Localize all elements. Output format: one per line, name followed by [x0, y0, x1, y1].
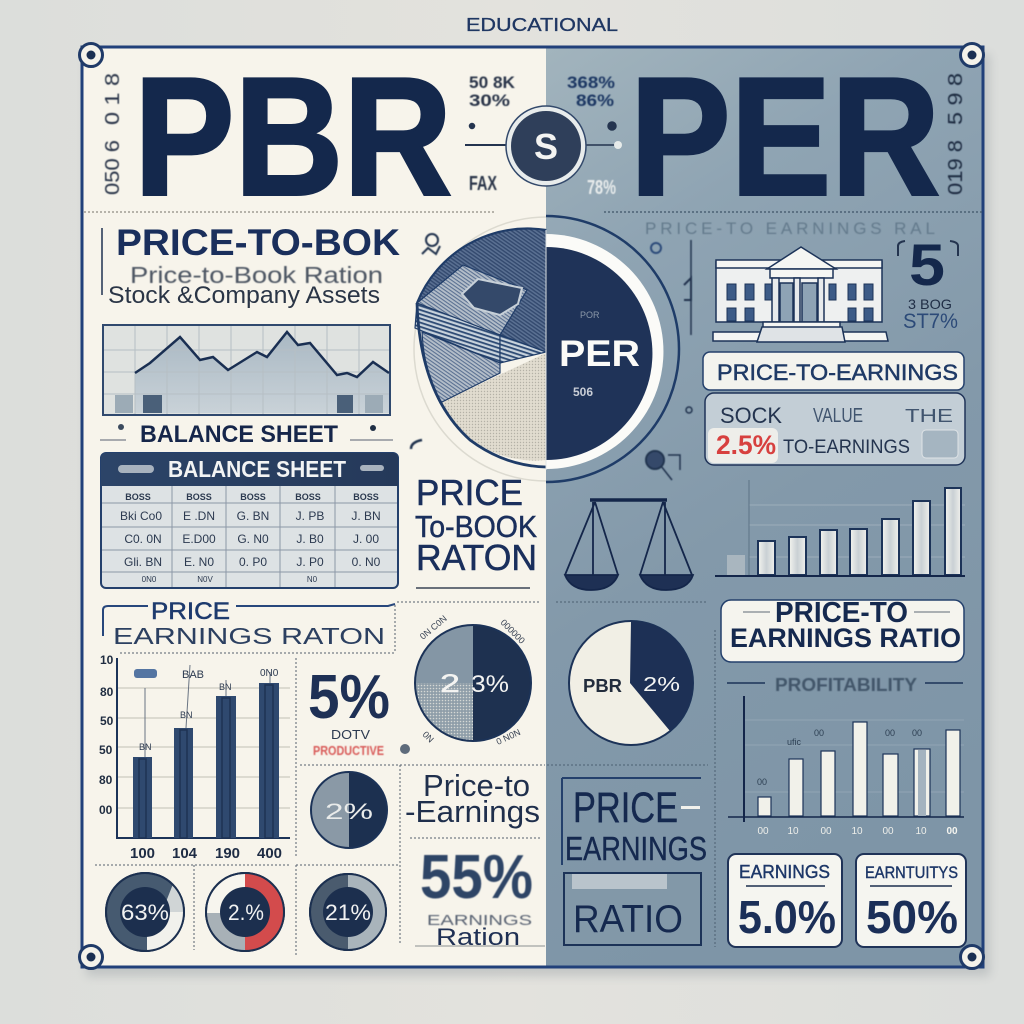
- central pie: PBR vs PER: [414, 216, 679, 482]
- corner rivets: [80, 44, 984, 968]
- label: price to-book ratio: To-BOOK: [415, 509, 537, 544]
- heading: profitability chart: PROFITABILITY: [775, 675, 917, 695]
- stat card: profitability 50%: 50%: [866, 891, 958, 943]
- balance sheet table: N0: [307, 575, 318, 584]
- balance sheet table: [101, 453, 398, 588]
- dashed dividers left: [95, 602, 545, 955]
- bar chart: left: 50: [100, 714, 114, 728]
- central pie: PBR vs PER: 506: [573, 385, 593, 399]
- label: price-to earnings: [405, 768, 540, 829]
- side notes: [102, 73, 967, 199]
- small doodle icons: [411, 234, 692, 480]
- label: price to-book ratio: RATON: [416, 537, 537, 578]
- bar chart: profitability: ufic: [787, 737, 802, 747]
- bar chart: left: 50: [99, 743, 113, 757]
- callout: price-to-earnings: PRICE-TO-EARNINGS: [717, 360, 958, 385]
- stat card: earnings 5.0%: [728, 854, 842, 947]
- side notes: 0 1 8: [102, 73, 124, 125]
- callout: price-to earnings ratio: [721, 597, 964, 662]
- heading: balance sheet: [100, 421, 393, 448]
- stat: 5 note: [898, 233, 958, 333]
- stat card: profitability 50%: [856, 854, 966, 947]
- label: price earnings ratio box: RATIO: [573, 898, 683, 941]
- callout: stock value: 2.5%: [716, 430, 776, 460]
- side notes: 019 8: [945, 140, 967, 195]
- pie chart: PBR 2%: 2%: [643, 674, 680, 696]
- callout: price earnings ratio: [103, 598, 395, 649]
- heading: balance sheet: BALANCE SHEET: [140, 421, 338, 448]
- bar chart: left: [99, 653, 290, 862]
- versus connectors: [465, 122, 622, 149]
- panel: PER side: [546, 47, 983, 967]
- stat: 5%: DOTV: [331, 727, 370, 742]
- donut: 21%: 21%: [325, 900, 371, 925]
- pie chart: 2.3%: 0 N0N: [495, 727, 522, 747]
- bar chart: left: BN: [219, 682, 232, 692]
- balance sheet table: G. N0: [237, 532, 269, 546]
- stat: 5 note: ST7%: [903, 310, 958, 333]
- label: price-to earnings: -Earnings: [405, 794, 540, 829]
- balance sheet table: 0N0: [142, 575, 157, 584]
- bar chart: left: 100: [130, 845, 155, 862]
- callout: price-to-earnings: [703, 352, 964, 390]
- balance sheet table: BOSS: [125, 492, 151, 502]
- balance sheet table: J. P0: [296, 555, 324, 569]
- subheading text: Price-to-Book Ration: [130, 262, 383, 288]
- balance sheet table: Gli. BN: [124, 555, 162, 569]
- title: PER: PER: [630, 42, 940, 230]
- versus badge: S: [534, 126, 558, 167]
- balance sheet table: J. 00: [353, 532, 379, 546]
- stat: 55%: EARNINGS: [427, 912, 532, 929]
- icon: bank building: [713, 247, 888, 342]
- side notes: FAX: [469, 173, 497, 195]
- title: PBR: PBR: [134, 42, 452, 230]
- bar chart: profitability: 00: [820, 826, 832, 837]
- pie chart: 2.3%: [415, 613, 531, 747]
- balance sheet table: E.D00: [182, 532, 216, 546]
- bar chart: profitability: 00: [912, 728, 922, 738]
- bar chart: profitability: 10: [915, 826, 927, 837]
- dashed dividers right: [547, 602, 715, 947]
- balance sheet table: E .DN: [183, 509, 215, 523]
- line chart: [103, 325, 390, 415]
- bar chart: left: 10: [100, 653, 114, 667]
- callout: stock value: THE: [905, 406, 953, 426]
- stat: 5 note: 5: [909, 233, 945, 298]
- label: price earnings ratio box: PRICE: [573, 784, 678, 832]
- balance sheet table: J. PB: [296, 509, 324, 523]
- balance sheet table: BOSS: [186, 492, 212, 502]
- bar chart: profitability: 10: [851, 826, 863, 837]
- central pie: PBR vs PER: POR: [580, 310, 600, 320]
- pie chart: 2%: 2%: [325, 799, 373, 824]
- callout: stock value: SOCK: [720, 403, 782, 428]
- header label: EDUCATIONAL: [466, 15, 618, 35]
- donut: 21%: [310, 874, 386, 950]
- stat: 5%: PRODUCTIVE: [313, 743, 384, 758]
- bar chart: profitability: 00: [946, 826, 958, 837]
- stat card: earnings 5.0%: 5.0%: [738, 891, 836, 943]
- balance sheet table: J. B0: [296, 532, 324, 546]
- pie chart: 2.3%: 0N: [421, 729, 436, 745]
- subheading text: [108, 262, 383, 309]
- bar chart: left: BN: [139, 742, 152, 752]
- heading: price-to-book: PRICE-TO-BOK: [116, 222, 400, 263]
- balance sheet table: BOSS: [240, 492, 266, 502]
- bar chart: profitability: 00: [814, 728, 824, 738]
- callout: price earnings ratio: EARNINGS RATON: [113, 623, 385, 649]
- bar chart: profitability: 00: [885, 728, 895, 738]
- bar chart: left: 400: [257, 845, 282, 862]
- balance sheet table: 0. P0: [239, 555, 267, 569]
- stat: 55%: 55%: [420, 843, 533, 912]
- versus badge: [506, 106, 586, 186]
- stat card: earnings 5.0%: EARNINGS: [739, 862, 830, 882]
- pie left: book value cream slice: [440, 353, 546, 461]
- side notes: 050 6: [102, 140, 124, 195]
- pie chart: 2.3%: 000000: [499, 617, 527, 646]
- bar chart: profitability: 10: [787, 826, 799, 837]
- label: price earnings ratio box: [562, 778, 707, 945]
- bar chart: left: 104: [172, 845, 198, 862]
- balance sheet table: BALANCE SHEET: [168, 456, 346, 482]
- label: price earnings ratio box: EARNINGS: [565, 830, 707, 867]
- label: price to-book ratio: PRICE: [416, 472, 523, 513]
- bar chart: left: 190: [215, 845, 240, 862]
- balance sheet table: BOSS: [295, 492, 321, 502]
- callout: price earnings ratio: PRICE: [151, 598, 230, 625]
- panel: PBR side: [82, 47, 546, 967]
- side notes: 50 8K: [469, 73, 516, 92]
- pie chart: PBR 2%: PBR: [583, 676, 622, 696]
- balance sheet table: N0V: [197, 575, 213, 584]
- bar chart: left: 00: [99, 803, 113, 817]
- bar chart: profitability: 00: [882, 826, 894, 837]
- balance sheet table: J. BN: [351, 509, 381, 523]
- donut: 2% red: [206, 873, 284, 951]
- stat: 5 note: 3 BOG: [908, 296, 952, 312]
- subheading text: Stock &Company Assets: [108, 282, 380, 309]
- bar chart: left: 80: [99, 773, 113, 787]
- balance sheet table: 0. N0: [352, 555, 381, 569]
- donut: 63%: 63%: [121, 900, 169, 925]
- bar chart: left: 0N0: [260, 668, 279, 679]
- faded heading: price-to-earnings: PRICE-TO EARNINGS RAL: [645, 219, 935, 238]
- callout: stock value: [705, 393, 965, 465]
- balance sheet table: BOSS: [353, 492, 379, 502]
- callout: price-to earnings ratio: PRICE-TO: [775, 597, 908, 629]
- bar chart: profitability: 00: [757, 826, 769, 837]
- icon: balance scale: [565, 500, 693, 590]
- donut: 63%: [106, 873, 184, 951]
- side notes: 368%: [567, 73, 615, 92]
- bar chart: left: BN: [180, 710, 193, 720]
- bar chart: rising right: [715, 480, 965, 576]
- bar chart: profitability: [728, 696, 964, 837]
- pie chart: PBR 2%: [569, 621, 693, 745]
- pie left: banknote stack: [415, 229, 546, 403]
- callout: stock value: TO-EARNINGS: [783, 437, 910, 458]
- balance sheet table: G. BN: [237, 509, 269, 523]
- stat: 55%: Ration: [436, 924, 520, 951]
- bar chart: left: BAB: [182, 669, 204, 681]
- pie chart: 2.3%: 2: [440, 670, 460, 698]
- stat card: profitability 50%: EARNTUITYS: [865, 863, 958, 882]
- stat: 5%: 5%: [308, 663, 390, 732]
- side notes: 86%: [576, 91, 614, 110]
- callout: stock value: VALUE: [813, 405, 863, 427]
- bar chart: profitability: 00: [757, 777, 767, 787]
- side notes: 5 9 8: [945, 73, 967, 125]
- pie chart: 2%: [311, 772, 387, 848]
- balance sheet table: Bki Co0: [120, 509, 162, 523]
- label: price to-book ratio: [415, 472, 537, 588]
- balance sheet table: E. N0: [184, 555, 214, 569]
- pie chart: 2.3%: 0N C0N: [418, 613, 449, 642]
- stat: 55%: [415, 843, 545, 951]
- pie label: PER: PER: [559, 333, 640, 374]
- pie chart: 2.3%: 3%: [471, 671, 509, 698]
- side notes: 30%: [469, 91, 510, 110]
- side notes: 78%: [587, 177, 616, 199]
- callout: price-to earnings ratio: EARNINGS RATIO: [730, 623, 961, 653]
- donut: 2% red: 2.%: [228, 900, 264, 925]
- stat: 5%: [308, 663, 410, 758]
- bar chart: left: 80: [100, 685, 114, 699]
- balance sheet table: C0. 0N: [124, 532, 162, 546]
- header divider: [84, 211, 982, 213]
- label: price-to earnings: Price-to: [423, 768, 530, 803]
